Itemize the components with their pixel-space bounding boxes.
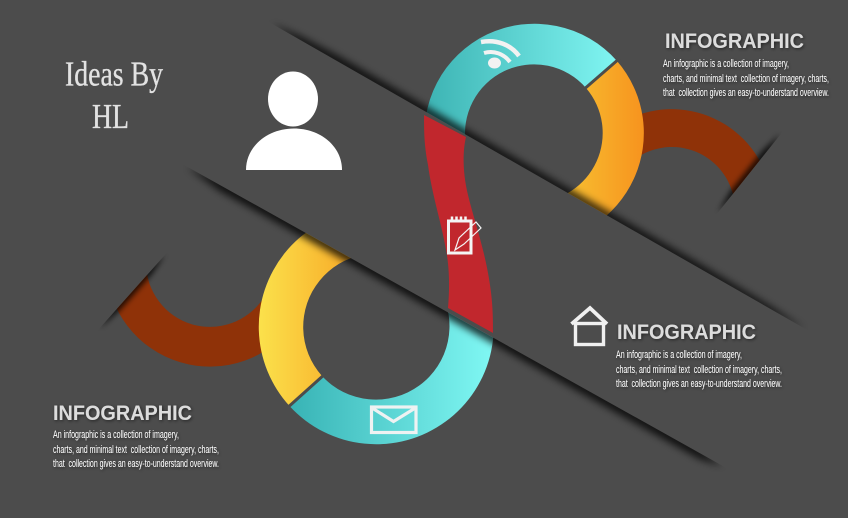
title: Ideas By HL: HL: [92, 97, 129, 136]
icon: notepad and pen: [448, 216, 481, 253]
separator: lower ring: [288, 375, 324, 407]
brown arc: lower left: [102, 257, 262, 367]
heading: INFOGRAPHIC: [617, 321, 756, 344]
segment: teal: [426, 24, 616, 134]
body copy: [53, 429, 219, 470]
title: Ideas By HL: Ideas By: [65, 54, 163, 94]
ring: upper loop: [272, 24, 805, 329]
icon: envelope: [372, 407, 416, 432]
red s-curve connector: [424, 115, 493, 333]
text block: lower left: [53, 402, 219, 470]
body copy: that collection gives an easy-to-understand overview.: [53, 458, 219, 470]
separator: upper ring: [584, 60, 618, 89]
body copy: [663, 58, 829, 99]
body copy: An infographic is a collection of imagery,: [616, 349, 742, 361]
heading: INFOGRAPHIC: [665, 30, 804, 53]
body copy: An infographic is a collection of imagery,: [53, 429, 179, 441]
body copy: [616, 349, 782, 390]
segment: yellow: [258, 233, 351, 405]
text block: middle right: [616, 321, 782, 390]
segment: teal: [290, 312, 494, 444]
text block: upper right: [663, 30, 829, 99]
body copy: charts, and minimal text collection of imagery, charts,: [53, 444, 219, 456]
ring: lower loop: [187, 167, 722, 466]
brown arc: upper right: [642, 109, 778, 210]
icon: person: [246, 72, 342, 170]
icon: house: [572, 308, 607, 344]
heading: INFOGRAPHIC: [53, 402, 192, 425]
title: Ideas By HL: [65, 54, 163, 136]
shadow: lower diagonal: [187, 167, 722, 466]
icon: wifi: [481, 41, 519, 68]
shadow: upper diagonal: [272, 24, 805, 329]
segment: orange: [568, 62, 644, 216]
